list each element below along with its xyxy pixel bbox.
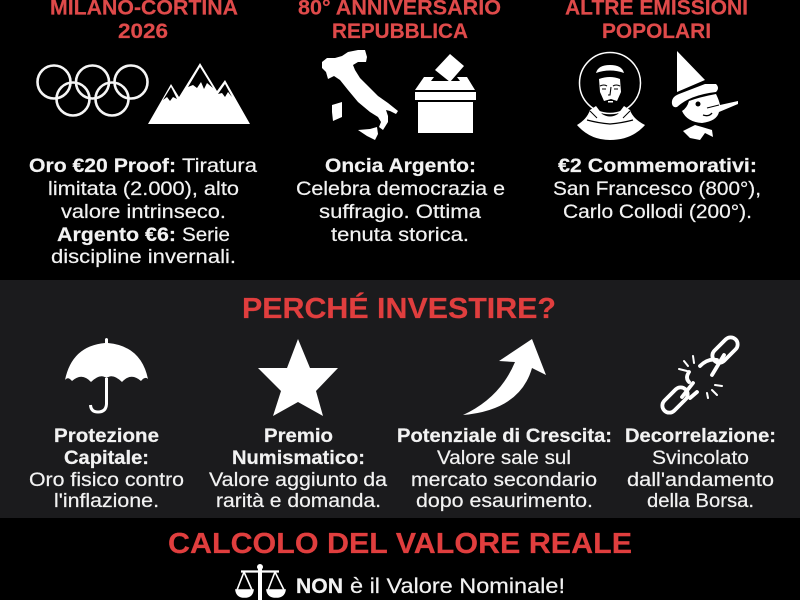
heading: altre emissioni popolari — [565, 0, 748, 43]
text: commemorative coins details: Carlo Collodi (200°). — [563, 201, 752, 223]
text: Oncia Argento details: Oncia Argento: — [325, 155, 476, 177]
text: protezione capitale — [29, 426, 184, 512]
text: non è il valore nominale: è il Valore Nominale! — [350, 575, 565, 598]
heading: 80 anniversario Repubblica — [298, 0, 501, 43]
heading: 80 anniversario Repubblica: REPUBBLICA — [332, 20, 468, 43]
text: Milano-Cortina details: discipline invernali. — [51, 246, 236, 268]
text: potenziale di crescita: dopo esaurimento. — [416, 491, 593, 512]
text: decorrelazione: dall'andamento — [627, 470, 774, 491]
panel: calcolo del valore reale — [168, 528, 632, 600]
heading: Milano-Cortina 2026 — [50, 0, 238, 43]
text: Milano-Cortina details: Tiratura — [182, 155, 257, 177]
text: Milano-Cortina details — [29, 155, 257, 268]
text: Milano-Cortina details: limitata (2.000), alto — [48, 178, 239, 200]
heading: calcolo del valore reale: CALCOLO DEL VALORE REALE — [168, 528, 632, 560]
text: Milano-Cortina details: valore intrinseco. — [61, 201, 226, 223]
panel: perché investire — [0, 280, 800, 518]
text: potenziale di crescita: Valore sale sul — [437, 448, 571, 469]
text: commemorative coins details: €2 Commemorativi: — [558, 155, 757, 177]
text: Oncia Argento details: suffragio. Ottima — [319, 201, 481, 223]
icon: ballot box — [415, 54, 476, 133]
icon: Pinocchio — [672, 51, 738, 140]
panel: 80 anniversario Repubblica — [296, 0, 505, 246]
heading: altre emissioni popolari: POPOLARI — [602, 20, 711, 43]
heading: Milano-Cortina 2026: 2026 — [118, 20, 168, 43]
text: protezione capitale: Capitale: — [64, 448, 149, 469]
text: Oncia Argento details: tenuta storica. — [331, 224, 469, 246]
text: potenziale di crescita: Potenziale di Crescita: — [397, 426, 612, 447]
text: protezione capitale: Oro fisico contro — [29, 470, 184, 491]
text: Milano-Cortina details: Argento €6: — [57, 224, 176, 246]
text: Milano-Cortina details: Oro €20 Proof: — [29, 155, 176, 177]
icon: star — [258, 339, 338, 416]
icon: map of Italy — [322, 50, 398, 140]
icon: San Francesco — [577, 52, 645, 140]
text: decorrelazione: della Borsa. — [647, 491, 754, 512]
icon: growth arrow — [463, 339, 546, 415]
text: premio numismatico: Valore aggiunto da — [209, 470, 387, 491]
panel: altre emissioni popolari — [553, 0, 761, 223]
text: protezione capitale: Protezione — [54, 426, 159, 447]
text: potenziale di crescita — [397, 426, 612, 512]
icon: scales — [236, 564, 285, 600]
text: premio numismatico: Premio — [264, 426, 333, 447]
panel: Milano-Cortina — [29, 0, 257, 268]
text: decorrelazione: Svincolato — [652, 448, 749, 469]
text: premio numismatico: Numismatico: — [232, 448, 365, 469]
text: Milano-Cortina details: Serie — [182, 224, 230, 246]
text: premio numismatico: rarità e domanda. — [216, 491, 381, 512]
text: non è il valore nominale: NON — [296, 575, 343, 598]
text: commemorative coins details — [553, 155, 761, 223]
icon: broken chain — [659, 334, 741, 416]
text: potenziale di crescita: mercato secondario — [411, 470, 597, 491]
text: premio numismatico — [209, 426, 387, 512]
icon: mountains — [148, 63, 250, 124]
icon: olympic rings — [38, 66, 148, 116]
heading: perché investire: PERCHÉ INVESTIRE? — [242, 291, 556, 325]
text: protezione capitale: l'inflazione. — [54, 491, 159, 512]
icon: umbrella — [65, 338, 148, 412]
text: commemorative coins details: San Francesco (800°), — [553, 178, 761, 200]
text: decorrelazione — [625, 426, 776, 512]
text: Oncia Argento details — [296, 155, 505, 246]
text: decorrelazione: Decorrelazione: — [625, 426, 776, 447]
text: Oncia Argento details: Celebra democrazia e — [296, 178, 505, 200]
